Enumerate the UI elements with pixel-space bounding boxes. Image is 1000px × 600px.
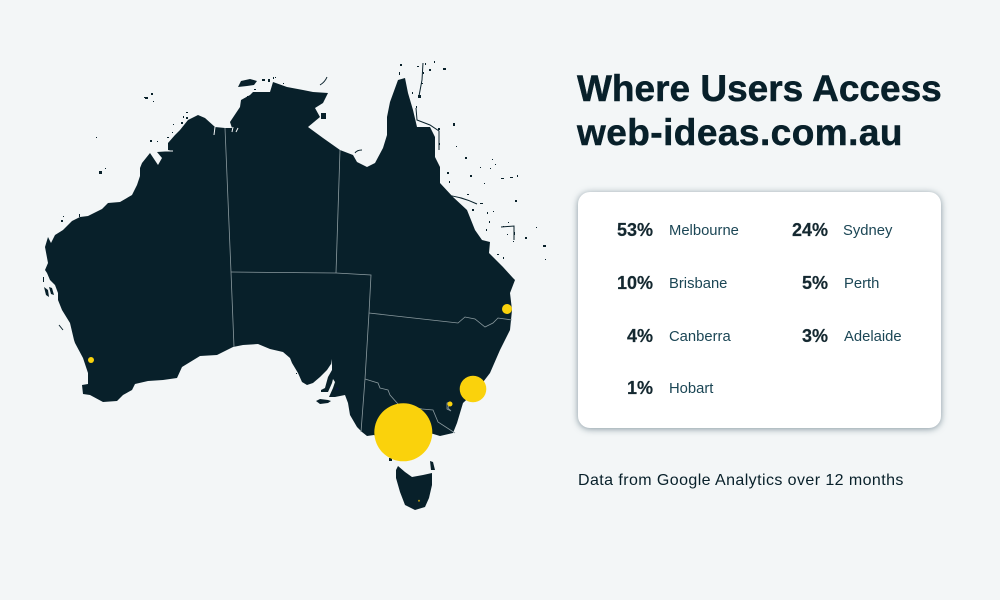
text: 3%: [802, 326, 828, 346]
marker: Perth: [88, 357, 94, 363]
text: Melbourne: [669, 223, 739, 239]
stat: Canberra: [627, 326, 731, 346]
state borders: [225, 128, 512, 433]
stat: Perth: [802, 273, 879, 293]
title: [576, 68, 942, 153]
marker: Brisbane: [502, 304, 512, 314]
marker: Melbourne: [374, 403, 432, 461]
marker: Hobart: [418, 500, 420, 502]
main islands: [44, 79, 435, 510]
text: 4%: [627, 326, 653, 346]
panel: city statistics: [578, 192, 941, 428]
stat: Melbourne: [617, 220, 739, 240]
text: 53%: [617, 220, 653, 240]
text: 24%: [792, 220, 828, 240]
stat: Sydney: [792, 220, 892, 240]
text: 10%: [617, 273, 653, 293]
stat: Hobart: [627, 378, 714, 398]
source note: Data from Google Analytics over 12 months: [578, 472, 904, 489]
text: 1%: [627, 378, 653, 398]
text: 5%: [802, 273, 828, 293]
text: Sydney: [843, 223, 892, 239]
text: Perth: [844, 276, 879, 292]
stat: Adelaide: [802, 326, 902, 346]
reefs and thin island arcs: [59, 63, 514, 330]
small islands: [43, 61, 546, 374]
marker: Adelaide: [336, 388, 338, 390]
marker: Sydney: [460, 376, 486, 402]
title: web-ideas.com.au: [577, 112, 903, 153]
text: Brisbane: [669, 276, 727, 292]
title: Where Users Access: [577, 68, 942, 109]
marker: Canberra: [448, 402, 452, 406]
coastal inlets: [162, 100, 423, 151]
mainland: [45, 78, 515, 445]
text: Canberra: [669, 329, 731, 345]
stat: Brisbane: [617, 273, 727, 293]
map of Australia: [43, 61, 546, 510]
text: Adelaide: [844, 329, 902, 345]
text: Hobart: [669, 381, 713, 397]
